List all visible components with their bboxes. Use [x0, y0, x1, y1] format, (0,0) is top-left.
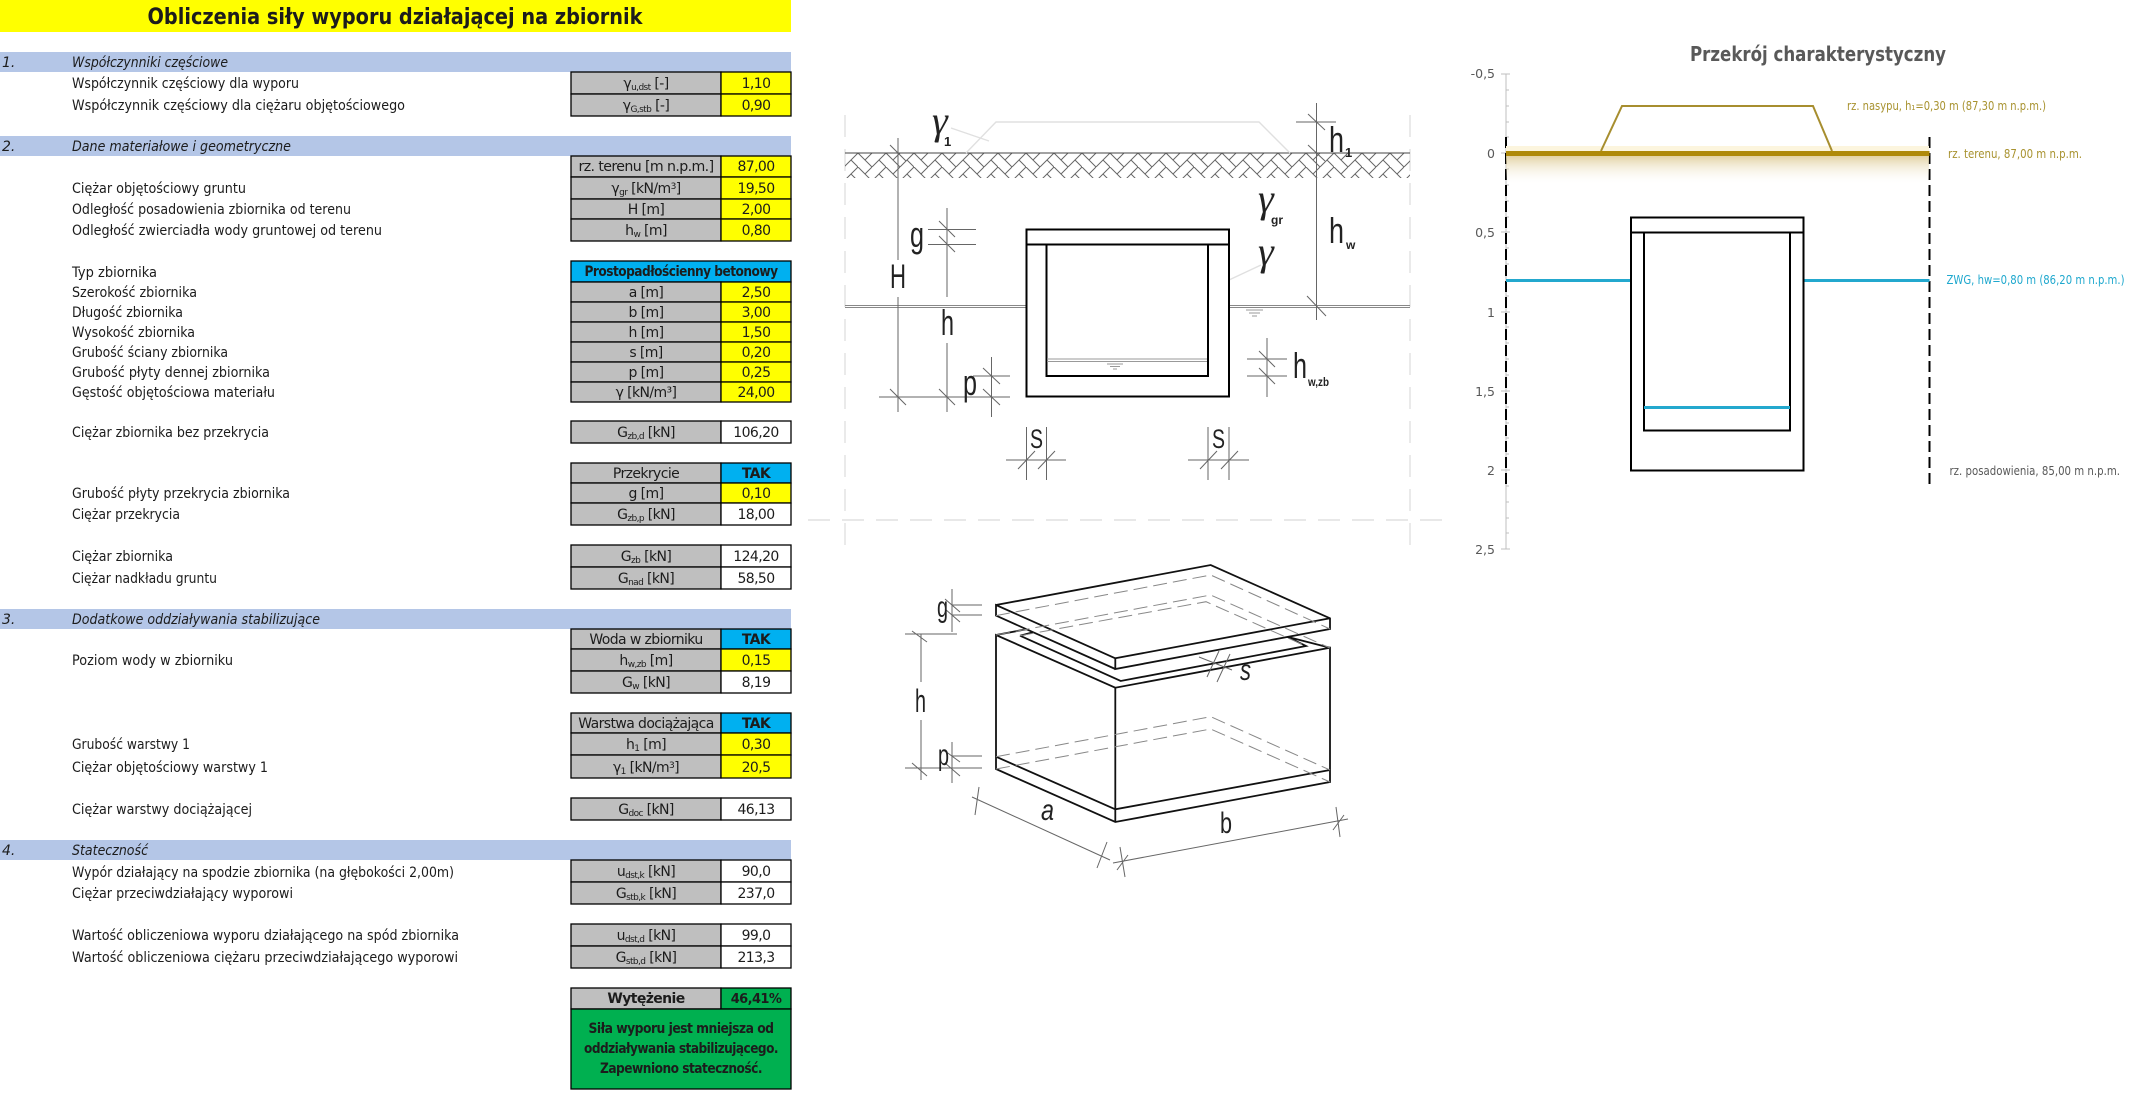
level labels: rz. nasypu, h₁=0,30 m (87,30 m n.p.m.) [1847, 98, 2046, 113]
table: partial factors: γ [623, 98, 630, 114]
table: tank geometry: 1,50 [742, 325, 770, 341]
surcharge layer block: h [626, 737, 634, 753]
characteristic values: dst,k [625, 871, 646, 881]
section 1 row labels: Współczynnik częściowy dla wyporu [72, 76, 299, 92]
water in tank [1644, 406, 1790, 409]
design values: [kN] [644, 928, 676, 944]
dimension labels: S [1212, 424, 1225, 454]
section 4 heading: 4. [2, 843, 15, 859]
tank and overburden weight: Ciężar nadkładu gruntu [72, 571, 217, 587]
tank and overburden weight: zb [631, 556, 641, 566]
characteristic values: G [616, 886, 626, 902]
characteristic values: 237,0 [737, 886, 775, 902]
section 1 heading: Współczynniki częściowe [72, 55, 228, 71]
cover block: zb,p [627, 514, 645, 524]
surcharge layer block: γ [613, 760, 621, 776]
dimension labels: gr [1271, 213, 1283, 227]
tank and overburden weight: 58,50 [737, 571, 775, 587]
surcharge layer block: 0,30 [742, 737, 770, 753]
water in tank block [72, 629, 791, 693]
table: terrain and soil: γ [611, 181, 619, 197]
surcharge weight: 46,13 [737, 802, 775, 818]
isometric dimension labels: b [1220, 807, 1232, 840]
dimension labels: w,zb [1307, 375, 1329, 389]
water in tank block: Woda w zbiorniku [589, 632, 703, 648]
characteristic values [72, 860, 791, 904]
table: terrain and soil: 19,50 [737, 181, 775, 197]
result: utilisation: Siła wyporu jest mniejsza od [588, 1021, 774, 1037]
dimension labels: γ [932, 98, 949, 143]
tank weight without cover: zb,d [627, 432, 644, 442]
dimension labels: γ [1258, 176, 1275, 221]
diagram: tank isometric view [905, 565, 1348, 877]
surcharge layer block: ] [674, 760, 679, 776]
table: tank geometry: 0,20 [742, 345, 770, 361]
surcharge weight: [kN] [643, 802, 674, 818]
depth axis: 0,5 [1475, 225, 1495, 240]
dimension labels: w [1345, 238, 1356, 252]
tank geometry labels [71, 265, 275, 401]
water in tank block: 0,15 [742, 653, 770, 669]
table: terrain and soil: rz. terenu [m n.p.m.] [578, 159, 714, 175]
surcharge weight: doc [628, 809, 643, 819]
design values: Wartość obliczeniowa wyporu działającego na spód zbiornika [72, 928, 459, 944]
surcharge layer block [72, 713, 791, 778]
diagram: tank cross-section [808, 98, 1446, 556]
surcharge layer block: Warstwa dociążająca [578, 716, 714, 732]
tank geometry labels: Długość zbiornika [72, 305, 183, 321]
table: tank geometry: γ [kN/m³] [616, 385, 677, 401]
table: tank geometry: 0,25 [742, 365, 770, 381]
characteristic values: stb,k [626, 893, 647, 903]
section 4 heading [0, 840, 791, 860]
section 2 heading: 2. [2, 139, 15, 155]
section 2 heading: Dane materiałowe i geometryczne [72, 139, 291, 155]
section 2 soil labels [72, 181, 382, 239]
depth axis: 1 [1487, 305, 1495, 320]
design values: Wartość obliczeniowa ciężaru przeciwdziałającego wyporowi [72, 950, 458, 966]
surcharge layer block: Grubość warstwy 1 [72, 737, 190, 753]
characteristic values: Ciężar przeciwdziałający wyporowi [72, 886, 293, 902]
chart title: Przekrój charakterystyczny [1690, 42, 1946, 66]
cover block: Ciężar przekrycia [72, 507, 180, 523]
isometric dimension labels: s [1240, 654, 1251, 687]
table: terrain and soil: H [m] [628, 202, 664, 218]
table: partial factors: 0,90 [742, 98, 770, 114]
level labels [1847, 98, 2124, 478]
title: Obliczenia siły wyporu działającej na zbiornik [148, 5, 644, 30]
depth axis: -0,5 [1471, 66, 1495, 81]
surcharge layer block: [m] [639, 737, 666, 753]
tank geometry labels: Grubość ściany zbiornika [72, 345, 228, 361]
result: utilisation: oddziaływania stabilizującego. [584, 1041, 778, 1057]
characteristic values: [kN] [645, 886, 676, 902]
characteristic values: u [617, 864, 625, 880]
table: partial factors: [-] [651, 98, 669, 114]
dimension labels: h [941, 302, 954, 343]
design values: G [616, 950, 626, 966]
cover block [72, 463, 791, 525]
section 3 heading: Dodatkowe oddziaływania stabilizujące [72, 612, 320, 628]
tank weight without cover [72, 421, 791, 443]
surcharge layer block: 1 [621, 767, 626, 777]
table: tank geometry: p [m] [629, 365, 664, 381]
table: terrain and soil: h [625, 223, 633, 239]
dimension labels: 1 [944, 134, 951, 149]
design values: 213,3 [737, 950, 775, 966]
tank and overburden weight: 124,20 [733, 549, 779, 565]
section 2 soil labels: Odległość zwierciadła wody gruntowej od terenu [72, 223, 382, 239]
depth axis: 1,5 [1475, 384, 1495, 399]
section 4 heading: Stateczność [72, 843, 149, 859]
table: tank geometry: Prostopadłościenny betonowy [584, 264, 778, 280]
tank weight without cover: [kN] [644, 425, 675, 441]
characteristic values: 90,0 [742, 864, 770, 880]
table: tank geometry: 3,00 [742, 305, 770, 321]
water in tank block: w [632, 682, 639, 692]
dimension labels: γ [1258, 229, 1275, 274]
section 3 heading [0, 609, 791, 629]
table: tank geometry: a [m] [629, 285, 663, 301]
table: terrain and soil [571, 156, 791, 241]
dimension labels: S [1030, 424, 1043, 454]
tank and overburden weight: [kN] [640, 549, 671, 565]
tank and overburden weight: G [621, 549, 631, 565]
isometric dimension labels: p [938, 739, 949, 772]
water in tank block: 8,19 [742, 675, 770, 691]
table: terrain and soil: [m] [640, 223, 667, 239]
isometric dimension labels [915, 591, 1251, 840]
tank and overburden weight: G [618, 571, 628, 587]
ground level line [1506, 151, 1930, 156]
table: tank geometry: 24,00 [737, 385, 775, 401]
design values: dst,d [625, 935, 644, 945]
table: partial factors [571, 72, 791, 116]
title [0, 0, 791, 32]
design values: stb,d [626, 957, 645, 967]
water in tank block: w,zb [628, 660, 647, 670]
tank geometry labels: Grubość płyty dennej zbiornika [72, 365, 270, 381]
tank weight without cover: 106,20 [733, 425, 779, 441]
excavation limits [1506, 137, 1930, 487]
cover block: [kN] [644, 507, 675, 523]
result: utilisation: Wytężenie [607, 991, 685, 1007]
characteristic values: Wypór działający na spodzie zbiornika (na głębokości 2,00m) [72, 865, 454, 881]
design values: 99,0 [742, 928, 770, 944]
surcharge layer block: TAK [742, 716, 772, 732]
table: partial factors: [-] [651, 76, 669, 92]
section 1 row labels: Współczynnik częściowy dla ciężaru objętościowego [72, 98, 405, 114]
groundwater line [1506, 279, 1930, 282]
cover block: 0,10 [742, 486, 770, 502]
surcharge layer block: Ciężar objętościowy warstwy 1 [72, 760, 268, 776]
level labels: rz. terenu, 87,00 m n.p.m. [1948, 146, 2082, 161]
tank and overburden weight: nad [628, 578, 643, 588]
depth axis: 2,5 [1475, 542, 1495, 557]
section 2 soil labels: Ciężar objętościowy gruntu [72, 181, 246, 197]
tank and overburden weight: [kN] [643, 571, 674, 587]
water in tank block: Poziom wody w zbiorniku [72, 653, 233, 669]
table: partial factors: G,stb [630, 105, 652, 115]
surcharge layer block: [kN/m [626, 760, 669, 776]
table: terrain and soil: 3 [671, 182, 676, 192]
tank section [1631, 218, 1804, 470]
table: terrain and soil: gr [619, 188, 628, 198]
table: partial factors: u,dst [631, 83, 652, 93]
table: tank geometry: s [m] [629, 345, 663, 361]
water in tank block: G [622, 675, 632, 691]
depth axis: 2 [1487, 463, 1495, 478]
tank geometry labels: Wysokość zbiornika [72, 325, 195, 341]
table: tank geometry: h [m] [629, 325, 664, 341]
embankment [1601, 106, 1832, 151]
isometric dimension labels: g [937, 591, 948, 624]
section 1 heading: 1. [2, 55, 15, 71]
table: terrain and soil: [kN/m [627, 181, 671, 197]
result: utilisation: Zapewniono stateczność. [600, 1061, 762, 1077]
dimension labels: 1 [1345, 145, 1352, 160]
design values: u [617, 928, 625, 944]
surcharge weight: Ciężar warstwy dociążającej [72, 802, 252, 818]
water in tank block: TAK [742, 632, 772, 648]
dimension labels: p [963, 362, 977, 403]
dimension labels: g [910, 214, 924, 255]
surcharge layer block: 1 [634, 744, 639, 754]
tank geometry labels: Gęstość objętościowa materiału [72, 385, 275, 401]
table: tank geometry: 2,50 [742, 285, 770, 301]
section 2 heading [0, 136, 791, 156]
depth axis [1471, 66, 1510, 557]
table: tank geometry: b [m] [629, 305, 664, 321]
dimension labels: h [1293, 345, 1307, 386]
tank and overburden weight: Ciężar zbiornika [72, 549, 173, 565]
tank weight without cover: Ciężar zbiornika bez przekrycia [72, 425, 269, 441]
tank geometry labels: Typ zbiornika [71, 265, 157, 281]
dimension labels: h [1329, 119, 1344, 160]
result: utilisation [571, 988, 791, 1089]
surcharge layer block: 3 [669, 761, 674, 771]
cover block: TAK [742, 466, 772, 482]
cover block: g [m] [629, 486, 664, 502]
table: terrain and soil: 2,00 [742, 202, 770, 218]
water in tank block: [kN] [639, 675, 670, 691]
isometric dimension labels: a [1041, 794, 1054, 827]
section 1 heading [0, 52, 791, 72]
water in tank block: h [619, 653, 628, 669]
table: terrain and soil: 0,80 [742, 223, 770, 239]
cover block: G [617, 507, 627, 523]
design values: [kN] [645, 950, 676, 966]
dimension labels: h [1329, 210, 1344, 251]
section 1 row labels [72, 76, 405, 114]
table: terrain and soil: ] [676, 181, 681, 197]
result: utilisation: 46,41% [731, 992, 782, 1007]
cover block: Grubość płyty przekrycia zbiornika [72, 486, 290, 502]
table: partial factors: γ [623, 76, 631, 92]
section 3 heading: 3. [2, 612, 15, 628]
tank and overburden weight [72, 545, 791, 589]
isometric dimension labels: h [915, 683, 926, 719]
table: terrain and soil: 87,00 [737, 159, 775, 175]
table: tank geometry [571, 261, 791, 402]
design values [72, 924, 791, 968]
dimension labels [890, 98, 1356, 454]
surcharge weight: G [618, 802, 628, 818]
chart: characteristic section [1471, 42, 2124, 557]
depth axis: 0 [1487, 146, 1495, 161]
table: partial factors: 1,10 [742, 76, 770, 92]
surcharge layer block: 20,5 [742, 760, 770, 776]
water in tank block: [m] [646, 653, 673, 669]
characteristic values: [kN] [644, 864, 675, 880]
ground glow [1506, 146, 1929, 185]
tank weight without cover: G [617, 425, 627, 441]
cover block: Przekrycie [613, 466, 679, 482]
dimension labels: H [890, 258, 906, 296]
table: terrain and soil: w [633, 230, 640, 240]
surcharge weight [72, 798, 791, 820]
cover block: 18,00 [737, 507, 775, 523]
section 2 soil labels: Odległość posadowienia zbiornika od terenu [72, 202, 351, 218]
tank geometry labels: Szerokość zbiornika [72, 285, 197, 301]
